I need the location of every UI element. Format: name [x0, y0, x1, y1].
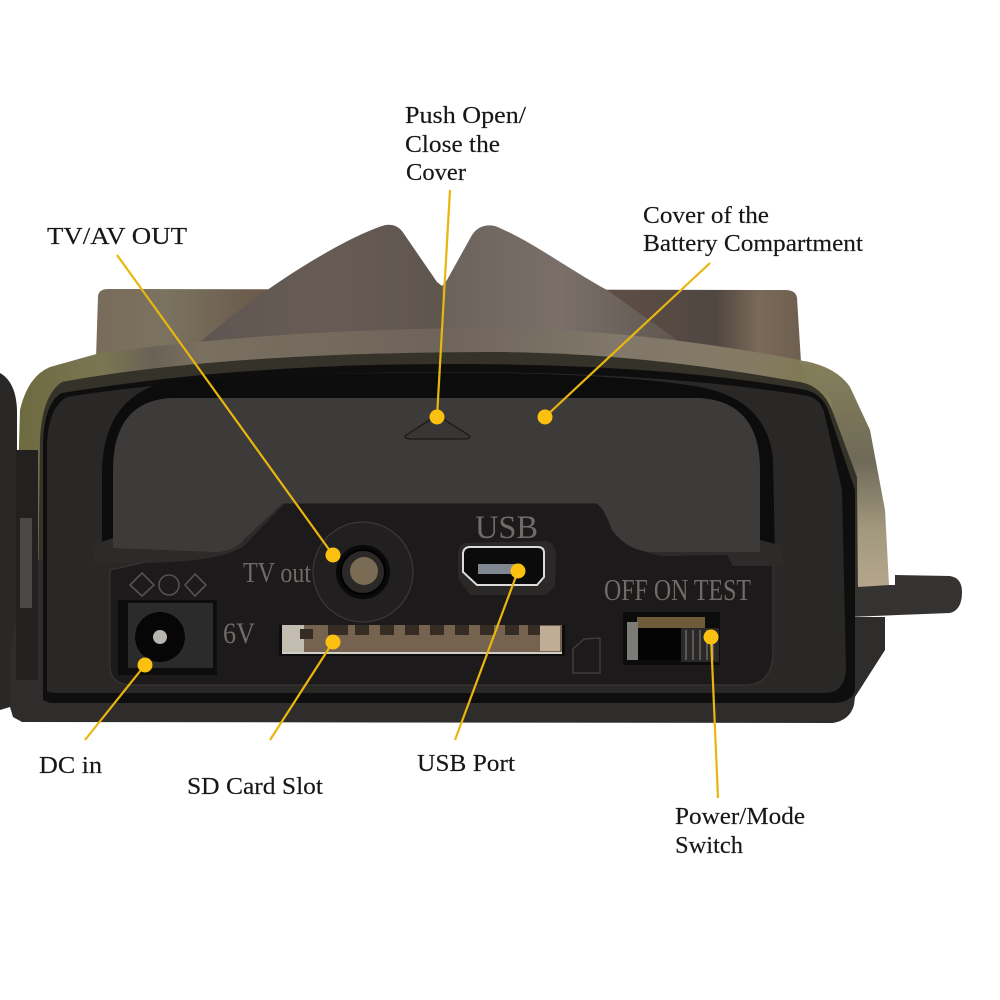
callout: Power/Mode Switch: Power/Mode	[675, 804, 805, 830]
SD card slot	[279, 625, 565, 656]
recess black edge	[43, 364, 855, 703]
callout: SD Card Slot	[187, 634, 340, 800]
callout: DC in	[39, 658, 152, 779]
embossed certification marks	[130, 573, 206, 596]
callout: Cover of the Battery Compartment: Cover of the	[643, 203, 769, 229]
left lens hood	[200, 225, 444, 345]
battery cover gap	[102, 373, 775, 555]
callout: Push Open/Close the Cover	[405, 103, 526, 424]
port panel	[110, 503, 773, 685]
TV out socket	[313, 522, 413, 622]
embossed TV out: TV out	[243, 557, 311, 589]
triangle mark	[405, 415, 470, 439]
USB port	[458, 541, 556, 595]
left door	[0, 373, 38, 710]
callout: DC in: DC in	[39, 753, 102, 779]
antenna tab	[848, 575, 962, 617]
callout: Power/Mode Switch: Switch	[675, 833, 743, 859]
inner recess	[47, 372, 846, 693]
card icon	[573, 638, 600, 673]
power switch	[623, 612, 720, 665]
embossed 6V: 6V	[223, 617, 255, 650]
embossed switch legend: OFF ON TEST	[604, 572, 751, 607]
camera illustration	[0, 225, 962, 723]
callout: Power/Mode Switch	[675, 630, 805, 859]
back housing block	[96, 289, 801, 362]
shell rim dark	[38, 352, 858, 600]
battery cover	[113, 398, 760, 552]
callout: Push Open/Close the Cover: Push Open/	[405, 103, 526, 129]
right flange	[615, 520, 783, 566]
embossed USB: USB	[475, 510, 538, 546]
callout: TV/AV OUT: TV/AV OUT	[47, 224, 187, 250]
callout: USB Port	[417, 564, 526, 777]
callout: TV/AV OUT	[47, 224, 340, 562]
callout: Cover of the Battery Compartment	[538, 203, 863, 424]
lower body	[10, 560, 885, 723]
callout: USB Port: USB Port	[417, 751, 515, 777]
left flange	[93, 503, 285, 563]
camouflage shell	[18, 328, 858, 600]
callout: Push Open/Close the Cover: Close the	[405, 132, 500, 158]
power jack	[118, 600, 217, 675]
callout: Push Open/Close the Cover: Cover	[406, 160, 466, 186]
right camouflage side	[798, 360, 889, 587]
right lens hood	[442, 225, 680, 345]
callout: Cover of the Battery Compartment: Battery Compartment	[643, 231, 863, 257]
callout: SD Card Slot: SD Card Slot	[187, 774, 323, 800]
door hinge shadow	[16, 450, 38, 680]
